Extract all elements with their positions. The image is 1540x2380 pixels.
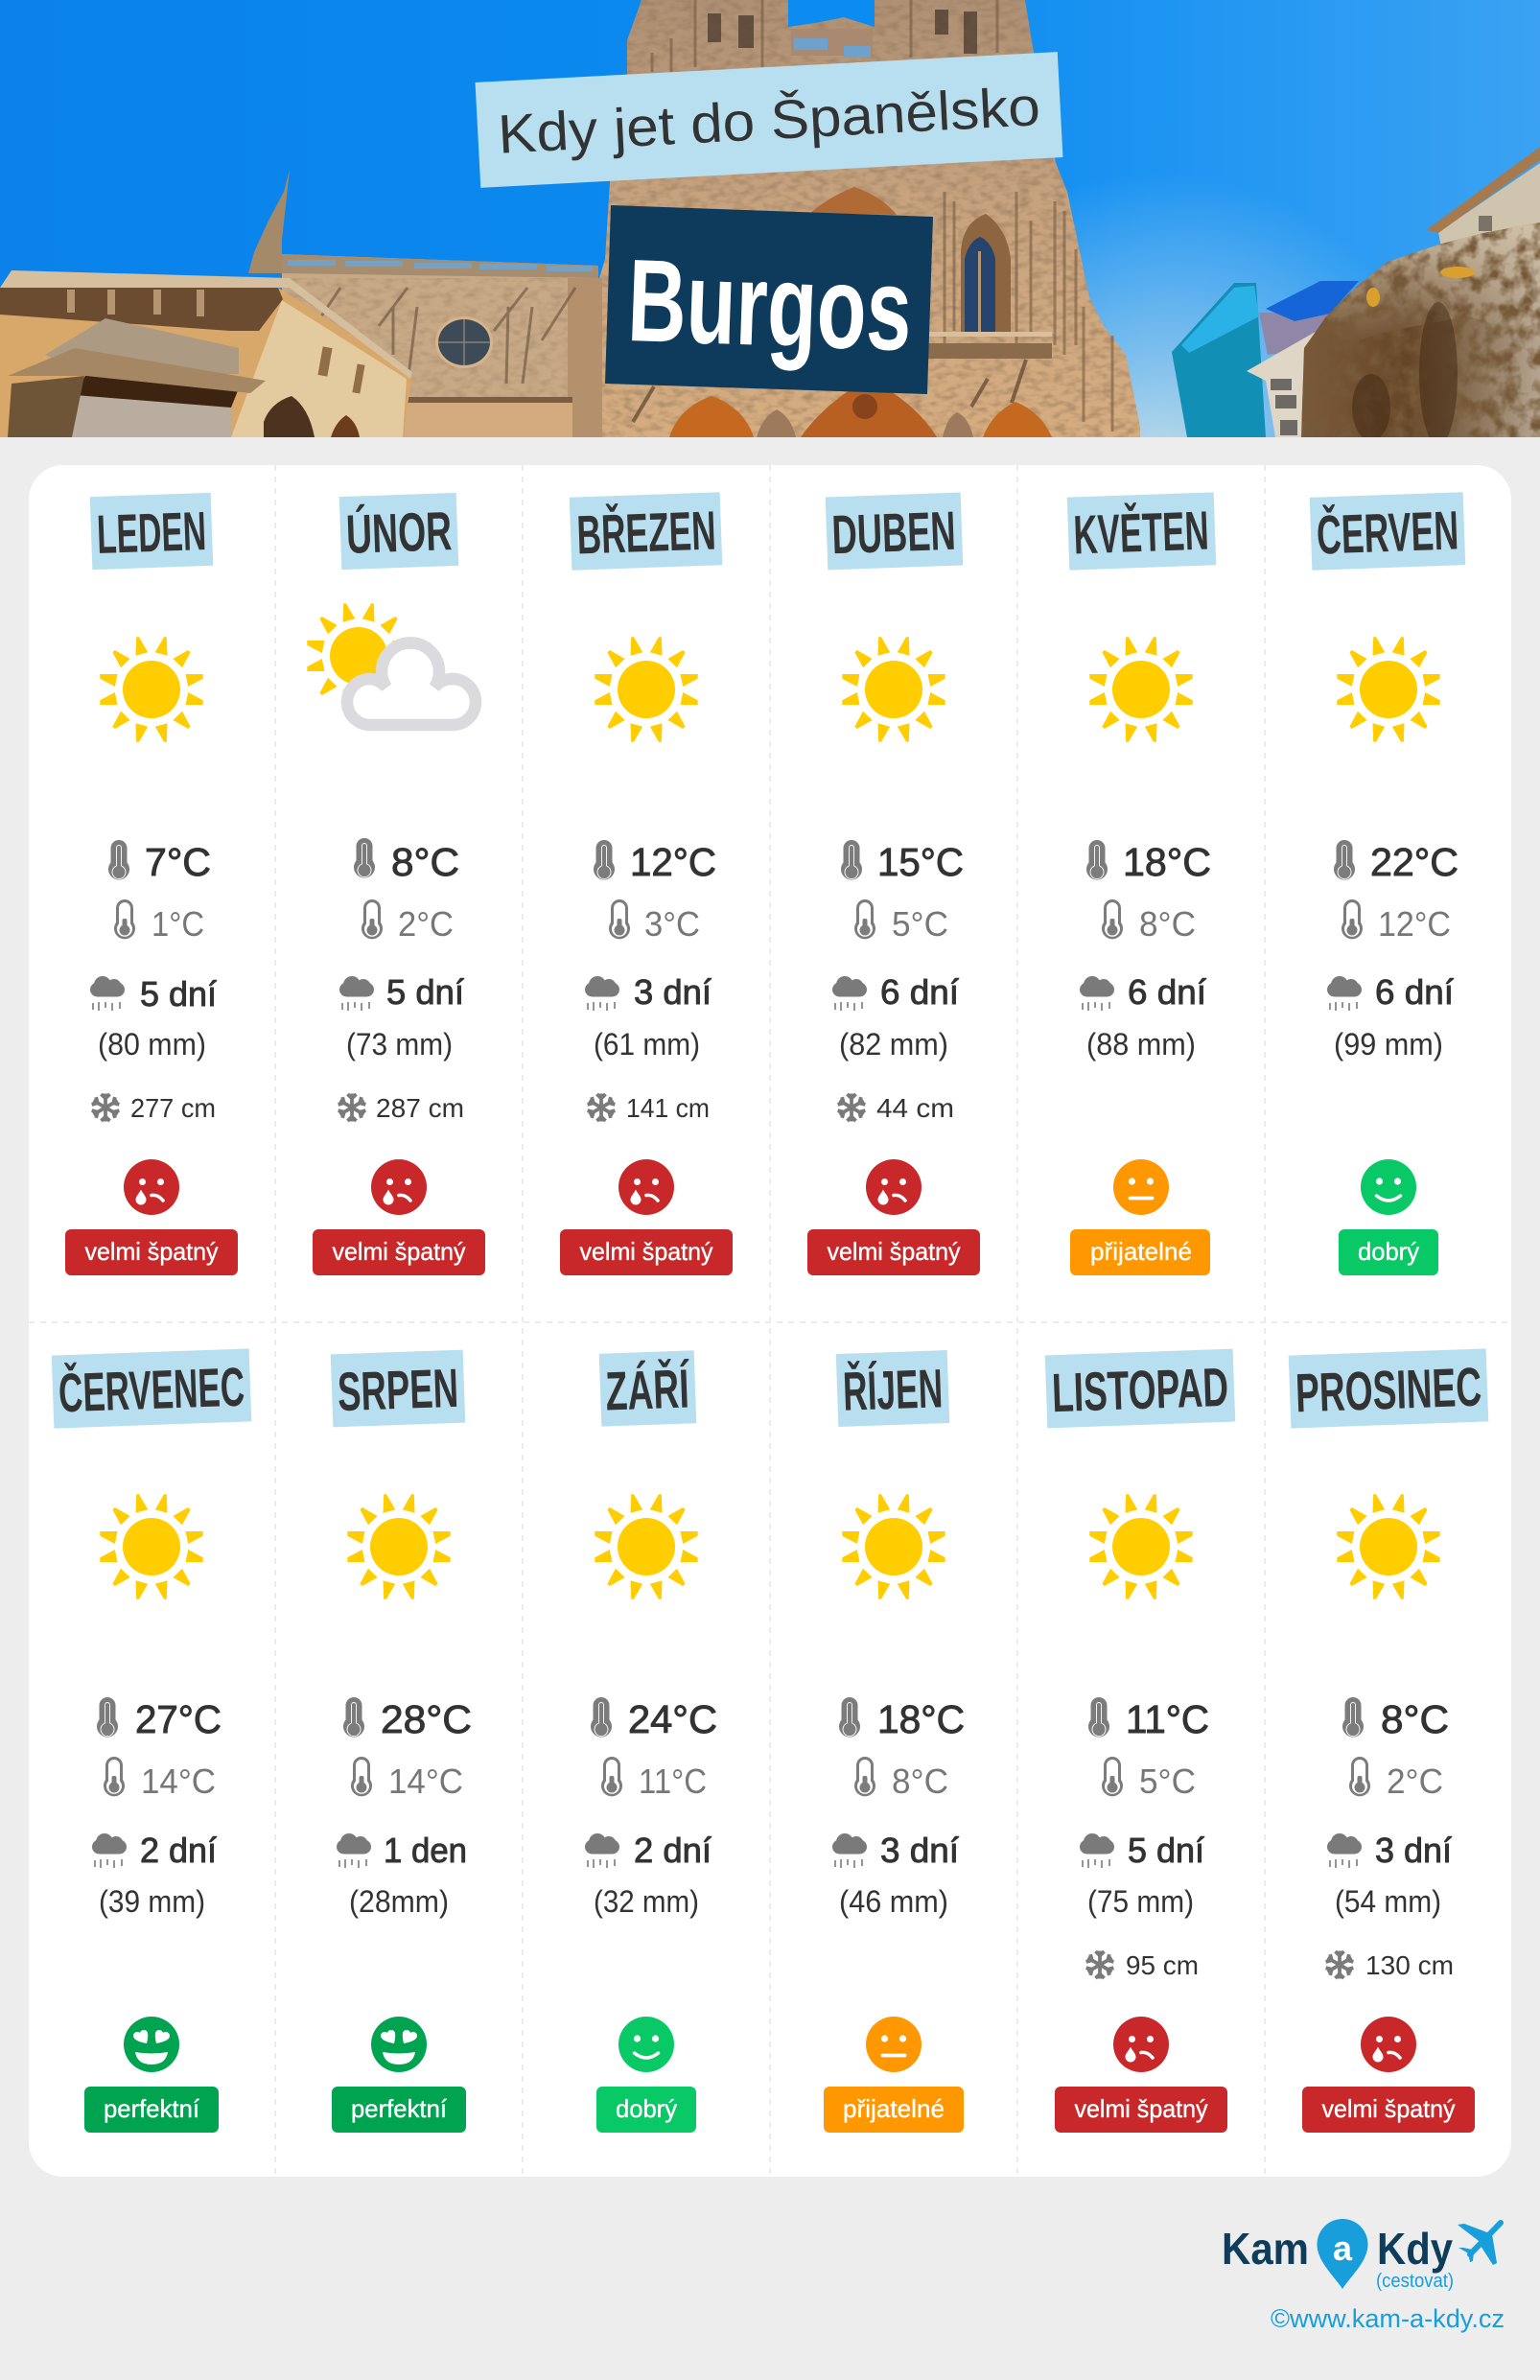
icon: plane <box>1458 2223 1501 2265</box>
rating badge: velmi špatný <box>579 1237 713 1266</box>
rating badge <box>1055 2087 1227 2133</box>
website url: ©www.kam-a-kdy.cz <box>1271 2304 1505 2333</box>
portal arches <box>669 396 754 437</box>
rating badge: přijatelné <box>1090 1237 1192 1266</box>
rainfall: (28mm) <box>349 1884 449 1919</box>
label <box>599 1350 696 1427</box>
month: SRPEN <box>331 1350 472 2133</box>
min temperature: 1°C <box>152 904 204 944</box>
rain days <box>832 1831 959 1870</box>
month: ČERVENEC <box>52 1348 251 2133</box>
snowfall: 277 cm <box>130 1093 216 1123</box>
max temperature: 15°C <box>877 840 964 884</box>
icon: sun <box>100 1494 203 1599</box>
city banner: Burgos: Burgos <box>626 235 914 375</box>
min temperature: 11°C <box>639 1762 707 1801</box>
rainfall: (32 mm) <box>594 1884 699 1919</box>
label: ČERVEN <box>1316 499 1459 567</box>
rating face <box>371 2017 427 2072</box>
snowfall <box>1085 1950 1199 1980</box>
rain days: 2 dní <box>634 1831 712 1870</box>
rating face <box>124 2017 179 2072</box>
snowfall <box>338 1093 464 1123</box>
min temperature <box>1342 899 1451 944</box>
logo: Kam a Kdy: Kam <box>1222 2224 1309 2274</box>
rain days <box>585 972 712 1012</box>
icon: sun <box>1337 1494 1440 1599</box>
rating badge: velmi špatný <box>332 1237 466 1266</box>
icon: sun <box>1089 1494 1193 1599</box>
month: ZÁŘÍ <box>585 1350 717 2133</box>
max temperature: 18°C <box>1123 840 1211 884</box>
icon: sun <box>1337 637 1440 742</box>
min temperature <box>854 899 948 944</box>
icon: sun <box>595 637 698 742</box>
rating badge <box>1302 2087 1475 2133</box>
right scaffold and buildings <box>1172 281 1359 437</box>
max temperature: 7°C <box>145 840 211 884</box>
month: LISTOPAD <box>1045 1349 1235 2133</box>
rating badge: perfektní <box>351 2094 448 2123</box>
left nave and spire <box>0 170 602 437</box>
max temperature: 22°C <box>1370 840 1458 884</box>
max temperature <box>594 840 716 884</box>
buttress shadows <box>633 360 1026 422</box>
gothic window <box>961 214 1011 336</box>
max temperature <box>841 840 964 884</box>
upper arch <box>810 187 897 215</box>
min temperature <box>609 899 700 944</box>
month: PROSINEC <box>1289 1348 1488 2133</box>
header photo: Burgos cathedral <box>0 0 1540 446</box>
min temperature: 8°C <box>1139 904 1196 944</box>
icon: sun <box>1089 637 1193 742</box>
icon: sun and cloud <box>307 603 476 725</box>
max temperature: 27°C <box>135 1697 222 1741</box>
rating badge: velmi špatný <box>84 1237 219 1266</box>
label: ČERVENEC <box>58 1356 245 1424</box>
min temperature <box>351 1757 463 1801</box>
max temperature <box>591 1697 717 1741</box>
rating badge <box>1339 1229 1438 1275</box>
icon: sun <box>842 637 945 742</box>
rainfall: (80 mm) <box>98 1027 206 1062</box>
rain days <box>1327 972 1454 1012</box>
rain days <box>339 972 464 1012</box>
label: ÚNOR <box>345 501 453 566</box>
rating badge <box>65 1229 238 1275</box>
snowfall: 141 cm <box>626 1093 710 1123</box>
right house <box>1426 147 1540 247</box>
rating face <box>124 1159 179 1215</box>
label: KVĚTEN <box>1072 500 1210 566</box>
logo: Kam a Kdy <box>1222 2219 1501 2292</box>
rating badge: dobrý <box>1358 1237 1419 1266</box>
max temperature: 12°C <box>630 840 716 884</box>
logo: Kam a Kdy: Kdy <box>1377 2224 1453 2274</box>
foreground rock left <box>8 318 266 437</box>
label <box>1045 1349 1235 1428</box>
month: ČERVEN <box>1310 492 1465 1275</box>
max temperature: 11°C <box>1126 1697 1209 1741</box>
rating badge <box>313 1229 485 1275</box>
snowfall <box>91 1093 216 1123</box>
rating badge <box>84 2087 219 2133</box>
label: ŘÍJEN <box>842 1357 944 1423</box>
max temperature <box>108 840 211 884</box>
calendar panel <box>29 465 1511 2177</box>
snowfall: 44 cm <box>876 1093 954 1123</box>
rain days: 6 dní <box>880 972 959 1012</box>
snowfall <box>837 1093 954 1123</box>
max temperature: 28°C <box>381 1697 472 1741</box>
label: SRPEN <box>337 1358 459 1423</box>
rain days <box>832 972 959 1012</box>
rainfall: (82 mm) <box>839 1027 948 1062</box>
min temperature: 3°C <box>644 904 700 944</box>
rating face <box>618 1159 674 1215</box>
rain days: 5 dní <box>1128 1831 1204 1870</box>
label <box>339 493 458 570</box>
month: ÚNOR <box>307 493 485 1275</box>
left building block <box>0 288 412 437</box>
min temperature: 2°C <box>1387 1762 1443 1801</box>
max temperature: 8°C <box>1381 1697 1449 1741</box>
rain days: 3 dní <box>1375 1831 1452 1870</box>
rainfall: (99 mm) <box>1334 1027 1443 1062</box>
snowfall <box>1325 1950 1454 1980</box>
min temperature <box>854 1757 948 1801</box>
rating badge <box>560 1229 733 1275</box>
rain days: 5 dní <box>386 972 464 1012</box>
max temperature <box>343 1697 472 1741</box>
snowfall: 130 cm <box>1365 1950 1454 1980</box>
min temperature <box>104 1757 216 1801</box>
rating badge <box>1070 1229 1210 1275</box>
label <box>90 493 213 570</box>
label <box>52 1348 251 1429</box>
rating face <box>1361 1159 1416 1215</box>
cathedral tower <box>599 0 1146 437</box>
rain days: 2 dní <box>140 1831 217 1870</box>
label <box>826 493 963 570</box>
rainfall: (46 mm) <box>839 1884 948 1919</box>
label <box>836 1350 949 1427</box>
rating face <box>1113 2017 1169 2072</box>
label <box>331 1350 465 1427</box>
snowfall: 287 cm <box>376 1093 464 1123</box>
min temperature: 12°C <box>1378 904 1451 944</box>
snowfall <box>587 1093 710 1123</box>
min temperature: 5°C <box>892 904 948 944</box>
max temperature <box>97 1697 222 1741</box>
label <box>1310 492 1465 571</box>
label <box>570 492 722 571</box>
max temperature <box>354 838 459 884</box>
title banner: Kdy jet do Španělsko: Kdy jet do Španělsko <box>497 76 1041 166</box>
icon: sun <box>347 1494 451 1599</box>
max temperature <box>839 1697 965 1741</box>
rating badge <box>807 1229 980 1275</box>
rating badge: velmi špatný <box>1321 2094 1456 2123</box>
max temperature: 24°C <box>628 1697 717 1741</box>
icon: sun <box>842 1494 945 1599</box>
rainfall: (88 mm) <box>1086 1027 1196 1062</box>
month: BŘEZEN <box>560 492 733 1275</box>
city banner: Burgos <box>605 205 933 394</box>
min temperature <box>1102 1757 1196 1801</box>
max temperature <box>1088 1697 1209 1741</box>
icon: sun <box>100 637 203 742</box>
rating badge: perfektní <box>104 2094 200 2123</box>
rating badge: velmi špatný <box>1074 2094 1208 2123</box>
rating badge: velmi špatný <box>827 1237 961 1266</box>
rating face <box>1361 2017 1416 2072</box>
rain days <box>92 1831 217 1870</box>
min temperature: 14°C <box>388 1762 463 1801</box>
rating badge: přijatelné <box>843 2094 945 2123</box>
rainfall: (73 mm) <box>346 1027 453 1062</box>
rain days: 6 dní <box>1128 972 1206 1012</box>
rain days: 1 den <box>384 1831 467 1870</box>
min temperature <box>362 899 454 944</box>
min temperature: 8°C <box>892 1762 948 1801</box>
label: LISTOPAD <box>1051 1357 1229 1424</box>
rating face <box>371 1159 427 1215</box>
rainfall: (75 mm) <box>1087 1884 1194 1919</box>
label: LEDEN <box>96 501 207 566</box>
min temperature <box>601 1757 707 1801</box>
label: ZÁŘÍ <box>604 1357 691 1422</box>
rain days <box>585 1831 712 1870</box>
rain days <box>1080 1831 1204 1870</box>
rain days: 5 dní <box>140 974 217 1014</box>
min temperature: 2°C <box>398 904 454 944</box>
rainfall: (54 mm) <box>1335 1884 1441 1919</box>
rating badge <box>596 2087 696 2133</box>
rain days: 3 dní <box>880 1831 959 1870</box>
icon: map pin <box>1318 2219 1367 2289</box>
rainfall: (61 mm) <box>594 1027 700 1062</box>
rain days: 3 dní <box>634 972 712 1012</box>
rating badge <box>824 2087 964 2133</box>
rating face <box>1113 1159 1169 1215</box>
month: KVĚTEN <box>1067 492 1216 1275</box>
min temperature <box>1102 899 1196 944</box>
label: DUBEN <box>830 501 957 566</box>
right rock <box>1295 216 1540 446</box>
month: DUBEN <box>807 493 980 1275</box>
label: BŘEZEN <box>575 499 717 567</box>
rainfall: (39 mm) <box>99 1884 205 1919</box>
rain days: 6 dní <box>1375 972 1454 1012</box>
max temperature <box>1342 1697 1449 1741</box>
min temperature: 5°C <box>1139 1762 1196 1801</box>
min temperature <box>1349 1757 1443 1801</box>
snowfall: 95 cm <box>1126 1950 1199 1980</box>
month: LEDEN <box>65 493 238 1275</box>
label <box>1067 492 1216 571</box>
rain days <box>1080 972 1206 1012</box>
logo: Kam a Kdy: (cestovat) <box>1376 2271 1454 2292</box>
rating badge <box>332 2087 466 2133</box>
rating face <box>866 1159 922 1215</box>
rating badge: dobrý <box>616 2094 677 2123</box>
min temperature <box>114 899 204 944</box>
icon: sun <box>595 1494 698 1599</box>
month: ŘÍJEN <box>824 1350 965 2133</box>
max temperature: 8°C <box>391 840 459 884</box>
rain days <box>90 974 217 1014</box>
rating face <box>866 2017 922 2072</box>
rating face <box>618 2017 674 2072</box>
min temperature: 14°C <box>141 1762 216 1801</box>
icon: map pin: a <box>1333 2228 1353 2268</box>
max temperature: 18°C <box>877 1697 965 1741</box>
rain days <box>1327 1831 1452 1870</box>
ledge <box>927 343 1052 359</box>
title banner: Kdy jet do Španělsko <box>476 52 1062 188</box>
rain days <box>337 1831 467 1870</box>
